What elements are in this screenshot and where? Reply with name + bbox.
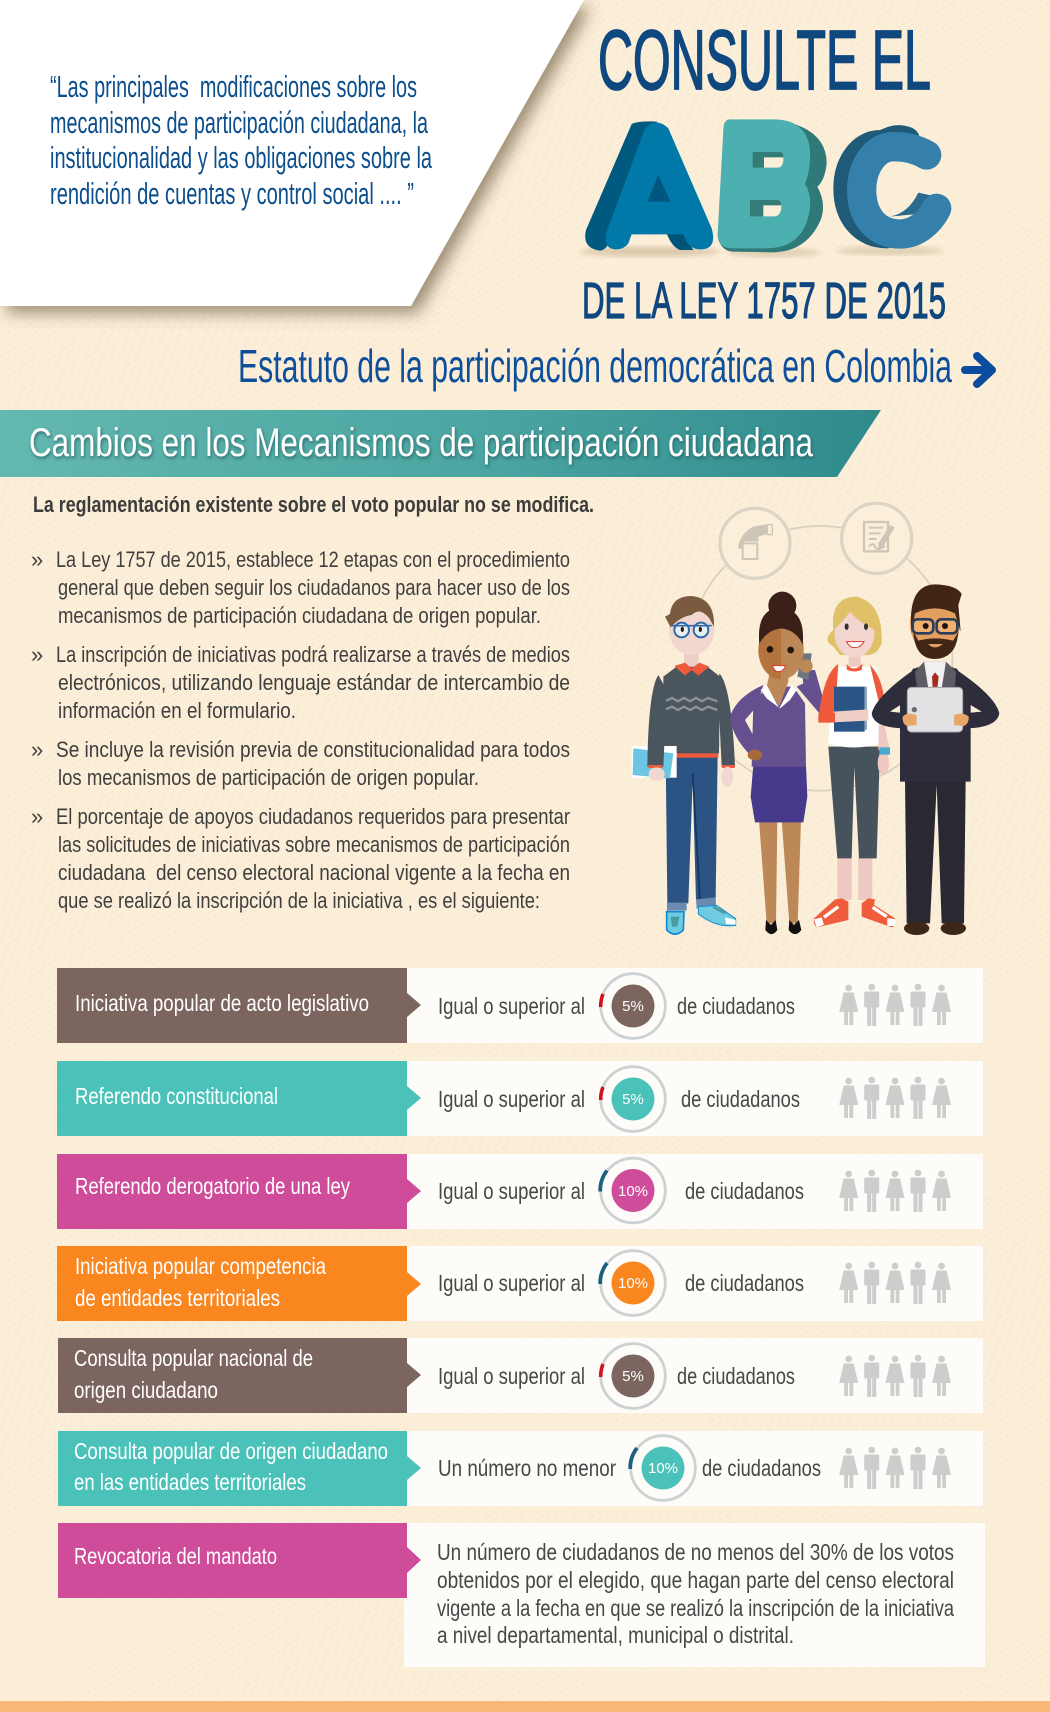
icon: document and pen bbox=[842, 503, 912, 573]
text: igual o superior: Igual o superior al bbox=[438, 993, 585, 1019]
bullet 3: » bbox=[31, 737, 43, 762]
text: de ciudadanos: de ciudadanos bbox=[681, 1086, 800, 1112]
quote panel bbox=[0, 0, 584, 306]
gauge 10%: 10% bbox=[648, 1460, 678, 1477]
bullet 1: » bbox=[31, 547, 43, 572]
gauge 10% bbox=[600, 1251, 665, 1315]
bullet 2 bbox=[31, 642, 570, 723]
text: igual o superior: Igual o superior al bbox=[438, 1363, 585, 1389]
bullet 3: los mecanismos de participación de origen popular. bbox=[58, 765, 479, 790]
quote text: institucionalidad y las obligaciones sobre la bbox=[50, 140, 432, 175]
text: de ciudadanos: de ciudadanos bbox=[685, 1270, 804, 1296]
label: revocatoria del mandato: Revocatoria del mandato bbox=[74, 1543, 277, 1569]
row 1 bbox=[57, 968, 983, 1043]
letter A bbox=[585, 121, 713, 251]
explanatory text: obtenidos por el elegido, que hagan parte del censo electoral bbox=[437, 1567, 954, 1593]
label: referendo constitucional: Referendo constitucional bbox=[75, 1083, 278, 1109]
text: de ciudadanos: de ciudadanos bbox=[677, 1363, 795, 1389]
ring with icons bbox=[688, 503, 952, 791]
bullet 4: ciudadana del censo electoral nacional vigente a la fecha en bbox=[58, 860, 570, 885]
label: consulta popular de origen: en las entidades territoriales bbox=[74, 1469, 306, 1495]
bullet 1: La Ley 1757 de 2015, establece 12 etapas con el procedimiento bbox=[56, 547, 570, 572]
label: consulta popular nacional: Consulta popular nacional de bbox=[74, 1345, 313, 1371]
text: igual o superior: Igual o superior al bbox=[438, 1270, 585, 1296]
banner heading: Cambios en los Mecanismos de participación ciudadana bbox=[29, 421, 814, 465]
bullet 1: mecanismos de participación ciudadana de origen popular. bbox=[58, 603, 541, 628]
icon: people bbox=[839, 1447, 951, 1489]
label: consulta popular nacional: origen ciudadano bbox=[74, 1377, 218, 1403]
ABC 3D letters bbox=[580, 119, 943, 257]
label: revocatoria del mandato bbox=[58, 1523, 421, 1598]
label: iniciativa popular competencia: de entidades territoriales bbox=[75, 1285, 280, 1311]
gauge 10% bbox=[630, 1436, 695, 1500]
gauge 10% bbox=[600, 1158, 665, 1223]
label: consulta popular de origen: Consulta popular de origen ciudadano bbox=[74, 1438, 388, 1464]
bullet 4: que se realizó la inscripción de la iniciativa , es el siguiente: bbox=[58, 888, 540, 913]
person: blonde woman bbox=[814, 597, 896, 927]
icon: people bbox=[839, 1262, 951, 1304]
gauge 10%: 10% bbox=[618, 1275, 648, 1292]
bullet 1: general que deben seguir los ciudadanos para hacer uso de los bbox=[58, 575, 570, 600]
bullet 3: Se incluye la revisión previa de constitucionalidad para todos bbox=[56, 737, 570, 762]
row 7 bbox=[58, 1523, 985, 1667]
explanatory text: Un número de ciudadanos de no menos del 30% de los votos bbox=[437, 1539, 954, 1565]
bullet 2: La inscripción de iniciativas podrá realizarse a través de medios bbox=[56, 642, 570, 667]
bullet 4: » bbox=[31, 804, 43, 829]
label: referendo derogatorio bbox=[57, 1154, 421, 1229]
icon: people bbox=[839, 984, 951, 1026]
label: consulta popular de origen bbox=[58, 1431, 421, 1506]
text: de ciudadanos: de ciudadanos bbox=[677, 993, 795, 1019]
bullet 1 bbox=[31, 547, 570, 628]
bullet 2: » bbox=[31, 642, 43, 667]
row 6 bbox=[58, 1431, 983, 1506]
text: de ciudadanos: de ciudadanos bbox=[702, 1455, 821, 1481]
gauge 10%: 10% bbox=[618, 1183, 648, 1200]
quote text: mecanismos de participación ciudadana, la bbox=[50, 105, 428, 140]
label: consulta popular nacional bbox=[58, 1338, 421, 1413]
row 4 bbox=[57, 1246, 983, 1321]
row 2 bbox=[57, 1061, 983, 1136]
person: woman in purple bbox=[730, 592, 824, 934]
section banner bbox=[0, 410, 881, 477]
bullet 2: electrónicos, utilizando lenguaje estándar de intercambio de bbox=[58, 670, 570, 695]
bullet 4: las solicitudes de iniciativas sobre mecanismos de participación bbox=[58, 832, 570, 857]
explanatory text bbox=[437, 1539, 954, 1648]
text: un numero no menor: Un número no menor bbox=[438, 1455, 616, 1481]
label: referendo constitucional bbox=[57, 1061, 421, 1136]
row 3 bbox=[57, 1154, 983, 1229]
quote text bbox=[50, 69, 432, 211]
bullet 3 bbox=[31, 737, 570, 790]
lead sentence: La reglamentación existente sobre el voto popular no se modifica. bbox=[33, 492, 594, 517]
icon: people bbox=[839, 1355, 951, 1397]
gauge 5%: 5% bbox=[622, 1368, 644, 1385]
label: iniciativa popular competencia: Iniciativa popular competencia bbox=[75, 1253, 326, 1279]
explanatory text: a nivel departamental, municipal o distrital. bbox=[437, 1622, 794, 1648]
person: man with sweater bbox=[632, 596, 736, 934]
bullet 2: información en el formulario. bbox=[58, 698, 296, 723]
text: igual o superior: Igual o superior al bbox=[438, 1178, 585, 1204]
icon: arrow bbox=[965, 356, 992, 384]
icon: ballot hand bbox=[720, 508, 790, 578]
quote text: “Las principales modificaciones sobre los bbox=[50, 69, 417, 104]
bullet 4 bbox=[31, 804, 570, 913]
footer strip bbox=[0, 1701, 1050, 1712]
gauge 5%: 5% bbox=[622, 1091, 644, 1108]
row 5 bbox=[58, 1338, 983, 1413]
label: iniciativa popular competencia bbox=[57, 1246, 421, 1321]
text: igual o superior: Igual o superior al bbox=[438, 1086, 585, 1112]
gauge 5%: 5% bbox=[622, 998, 644, 1015]
letter B bbox=[718, 119, 827, 252]
bullet 4: El porcentaje de apoyos ciudadanos requeridos para presentar bbox=[56, 804, 570, 829]
icon: people bbox=[839, 1077, 951, 1119]
person: man in suit bbox=[872, 584, 999, 935]
letter C bbox=[847, 138, 937, 235]
bullet list bbox=[31, 547, 570, 913]
text: de ciudadanos: de ciudadanos bbox=[685, 1178, 804, 1204]
gauge 5% bbox=[601, 1344, 665, 1408]
label: iniciativa popular de acto legislativo: Iniciativa popular de acto legislativo bbox=[75, 990, 369, 1016]
gauge 5% bbox=[601, 974, 665, 1038]
quote text: rendición de cuentas y control social .... ” bbox=[50, 176, 414, 211]
illustration: citizens bbox=[632, 503, 999, 935]
label: referendo derogatorio: Referendo derogatorio de una ley bbox=[75, 1173, 350, 1199]
icon: people bbox=[839, 1170, 951, 1212]
label: iniciativa popular de acto legislativo bbox=[57, 968, 421, 1043]
gauge 5% bbox=[601, 1067, 665, 1131]
